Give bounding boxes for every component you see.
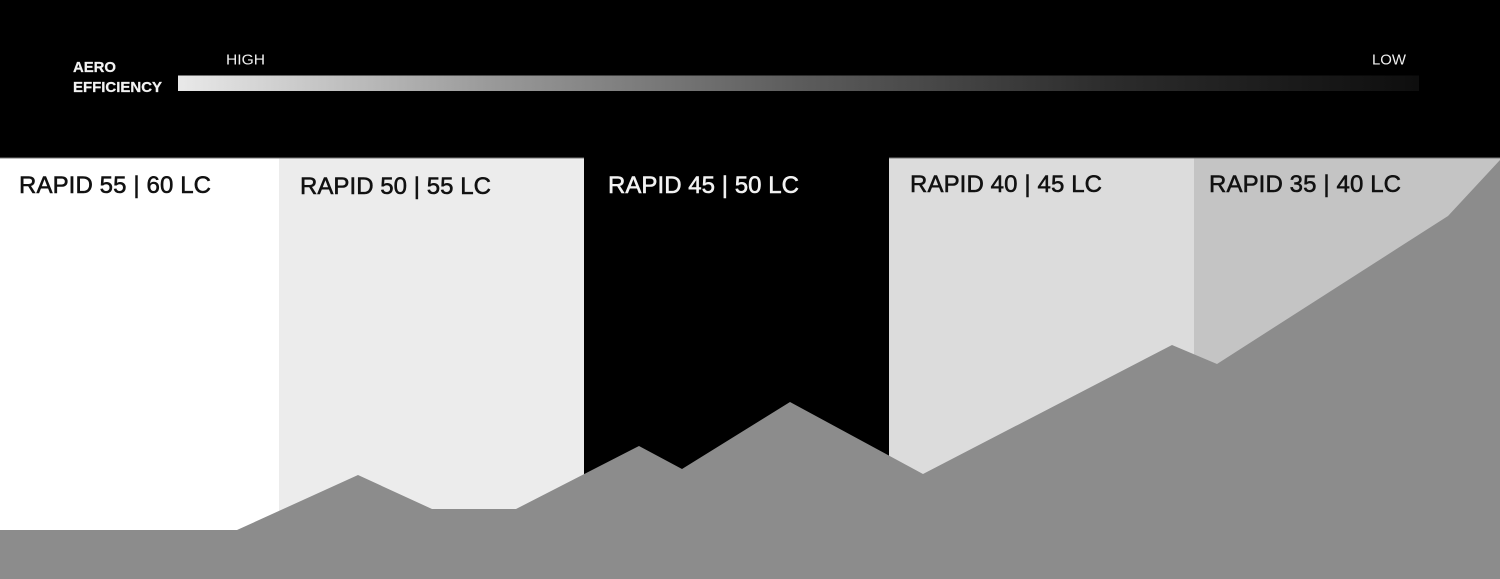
legend title xyxy=(73,59,162,96)
legend title: AERO xyxy=(73,59,116,76)
panel: rapid 55 | 60 LC xyxy=(0,158,279,579)
legend: aero efficiency scale xyxy=(73,52,1419,96)
gradient bar xyxy=(178,76,1419,91)
panel: rapid 45 | 50 LC xyxy=(584,158,889,579)
terrain profile xyxy=(0,160,1500,579)
panel heading: RAPID 35 | 40 LC xyxy=(1209,171,1401,198)
panel heading: RAPID 50 | 55 LC xyxy=(300,173,491,200)
header background xyxy=(0,0,1500,158)
panel heading: RAPID 55 | 60 LC xyxy=(19,172,211,199)
panel: rapid 50 | 55 LC xyxy=(279,158,584,579)
panel: rapid 35 | 40 LC xyxy=(1194,158,1500,579)
legend title: EFFICIENCY xyxy=(73,79,162,96)
panel heading: RAPID 40 | 45 LC xyxy=(910,171,1102,198)
panel: rapid 40 | 45 LC xyxy=(889,158,1194,579)
panel heading: RAPID 45 | 50 LC xyxy=(608,172,799,199)
label: low: LOW xyxy=(1372,52,1407,68)
label: high: HIGH xyxy=(226,52,265,68)
